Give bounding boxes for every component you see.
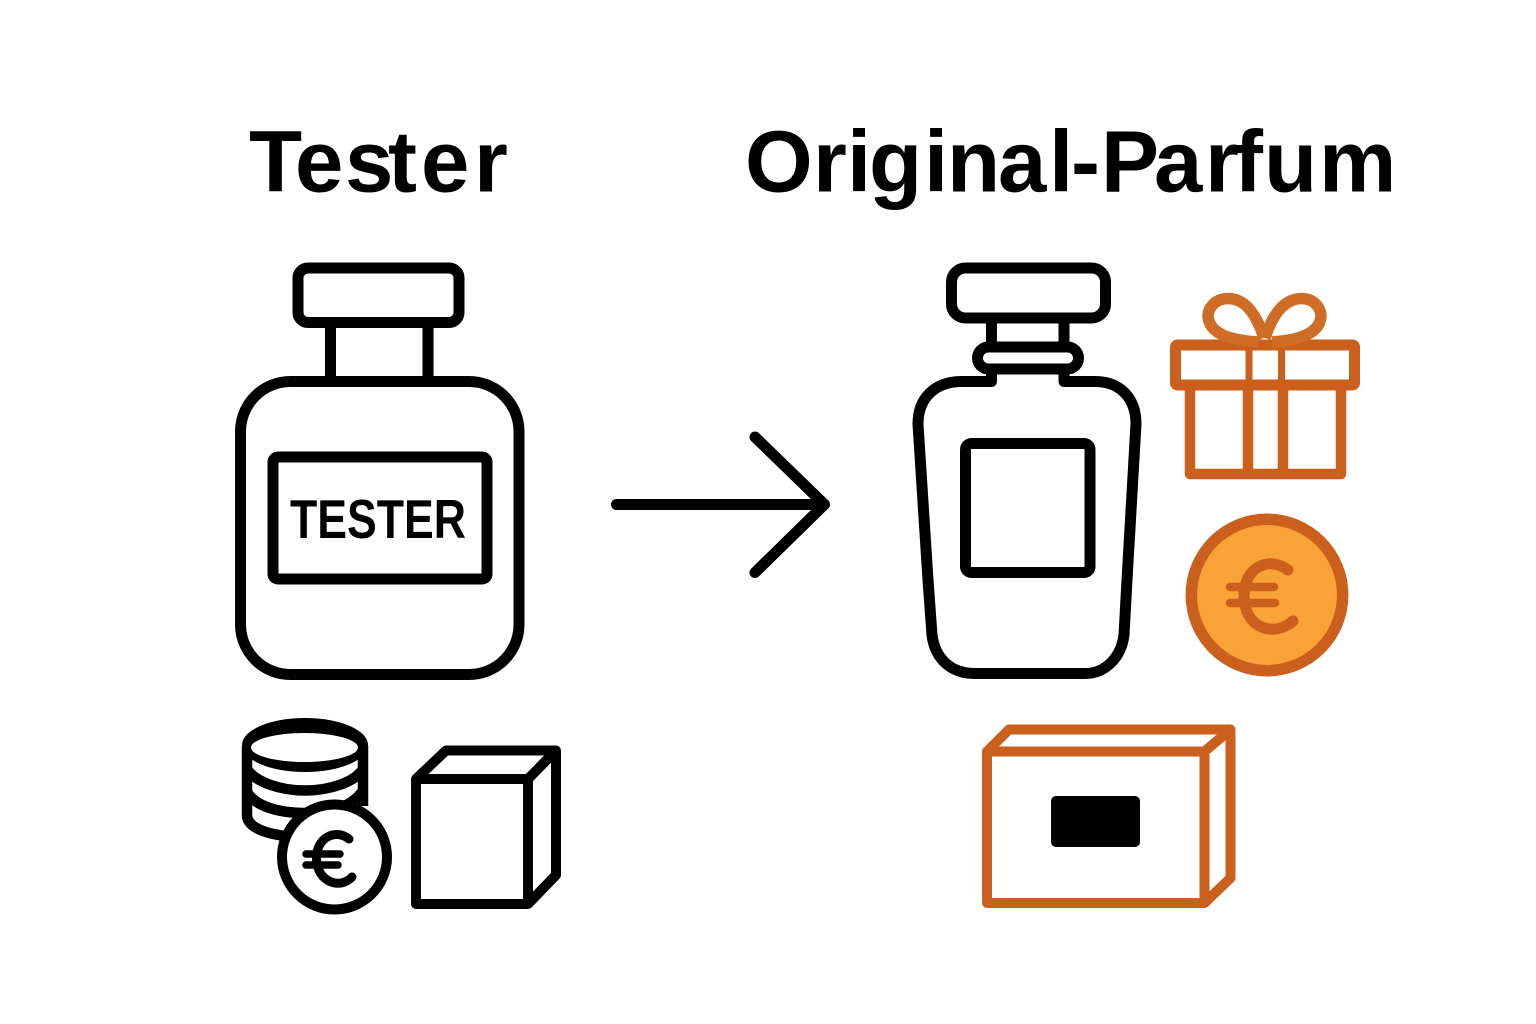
icon: orange perfume box: [987, 730, 1230, 903]
icon: plain box: [416, 750, 556, 904]
arrow: [616, 437, 824, 572]
icon: orange euro coin: [1191, 519, 1343, 671]
icon: tester bottle: [240, 268, 519, 674]
bottle label text: TESTER: [290, 488, 466, 550]
title: Tester: Tester: [249, 114, 508, 210]
icon: gift: [1176, 298, 1354, 474]
title: Original-Parfum: Original-Parfum: [745, 114, 1396, 210]
box label: [1051, 796, 1140, 847]
icon: original bottle: [918, 268, 1136, 674]
icon: coin stack with euro: [242, 718, 387, 910]
